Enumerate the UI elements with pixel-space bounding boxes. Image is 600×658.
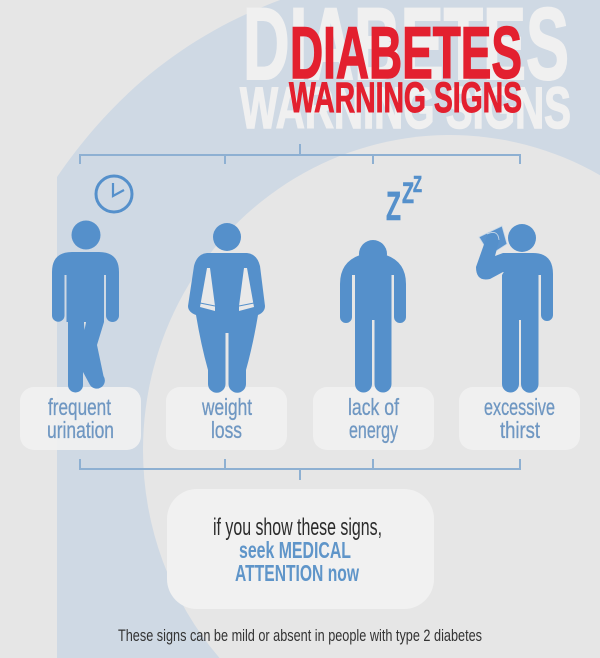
label: frequent urination bbox=[20, 387, 141, 450]
label: frequent urination: frequent bbox=[48, 394, 111, 420]
label: lack of energy: energy bbox=[349, 417, 398, 443]
label: weight loss bbox=[166, 387, 287, 450]
figure: frequent urination bbox=[52, 220, 119, 393]
icon: sleeping Z letters: Z bbox=[402, 177, 414, 210]
label: frequent urination: urination bbox=[47, 417, 114, 443]
label: excessive thirst: thirst bbox=[500, 417, 540, 443]
label: weight loss: weight bbox=[201, 394, 252, 420]
callout: seek medical attention: seek MEDICAL bbox=[239, 537, 351, 563]
label: weight loss: loss bbox=[211, 417, 242, 443]
footnote: These signs can be mild or absent in people with type 2 diabetes bbox=[118, 626, 482, 645]
label: excessive thirst: excessive bbox=[484, 394, 555, 420]
top bracket bbox=[80, 144, 520, 164]
icon: clock bbox=[96, 176, 132, 212]
label: lack of energy: lack of bbox=[348, 394, 399, 420]
label: excessive thirst bbox=[459, 387, 580, 450]
title bbox=[240, 0, 571, 141]
callout: seek medical attention: ATTENTION now bbox=[235, 560, 359, 586]
icon: glass bbox=[479, 226, 507, 255]
background inner gray circle bbox=[143, 135, 600, 658]
callout: seek medical attention: if you show these signs, bbox=[213, 514, 382, 541]
callout: seek medical attention bbox=[167, 489, 434, 609]
icon: sleeping Z letters: Z bbox=[386, 183, 401, 229]
icon: sleeping Z letters bbox=[386, 171, 422, 229]
figure: weight loss bbox=[188, 223, 265, 393]
figure: lack of energy bbox=[340, 240, 406, 392]
figure: excessive thirst bbox=[476, 224, 553, 393]
bottom bracket bbox=[80, 459, 520, 480]
label: lack of energy bbox=[313, 387, 434, 450]
icon: sleeping Z letters: Z bbox=[413, 171, 422, 197]
